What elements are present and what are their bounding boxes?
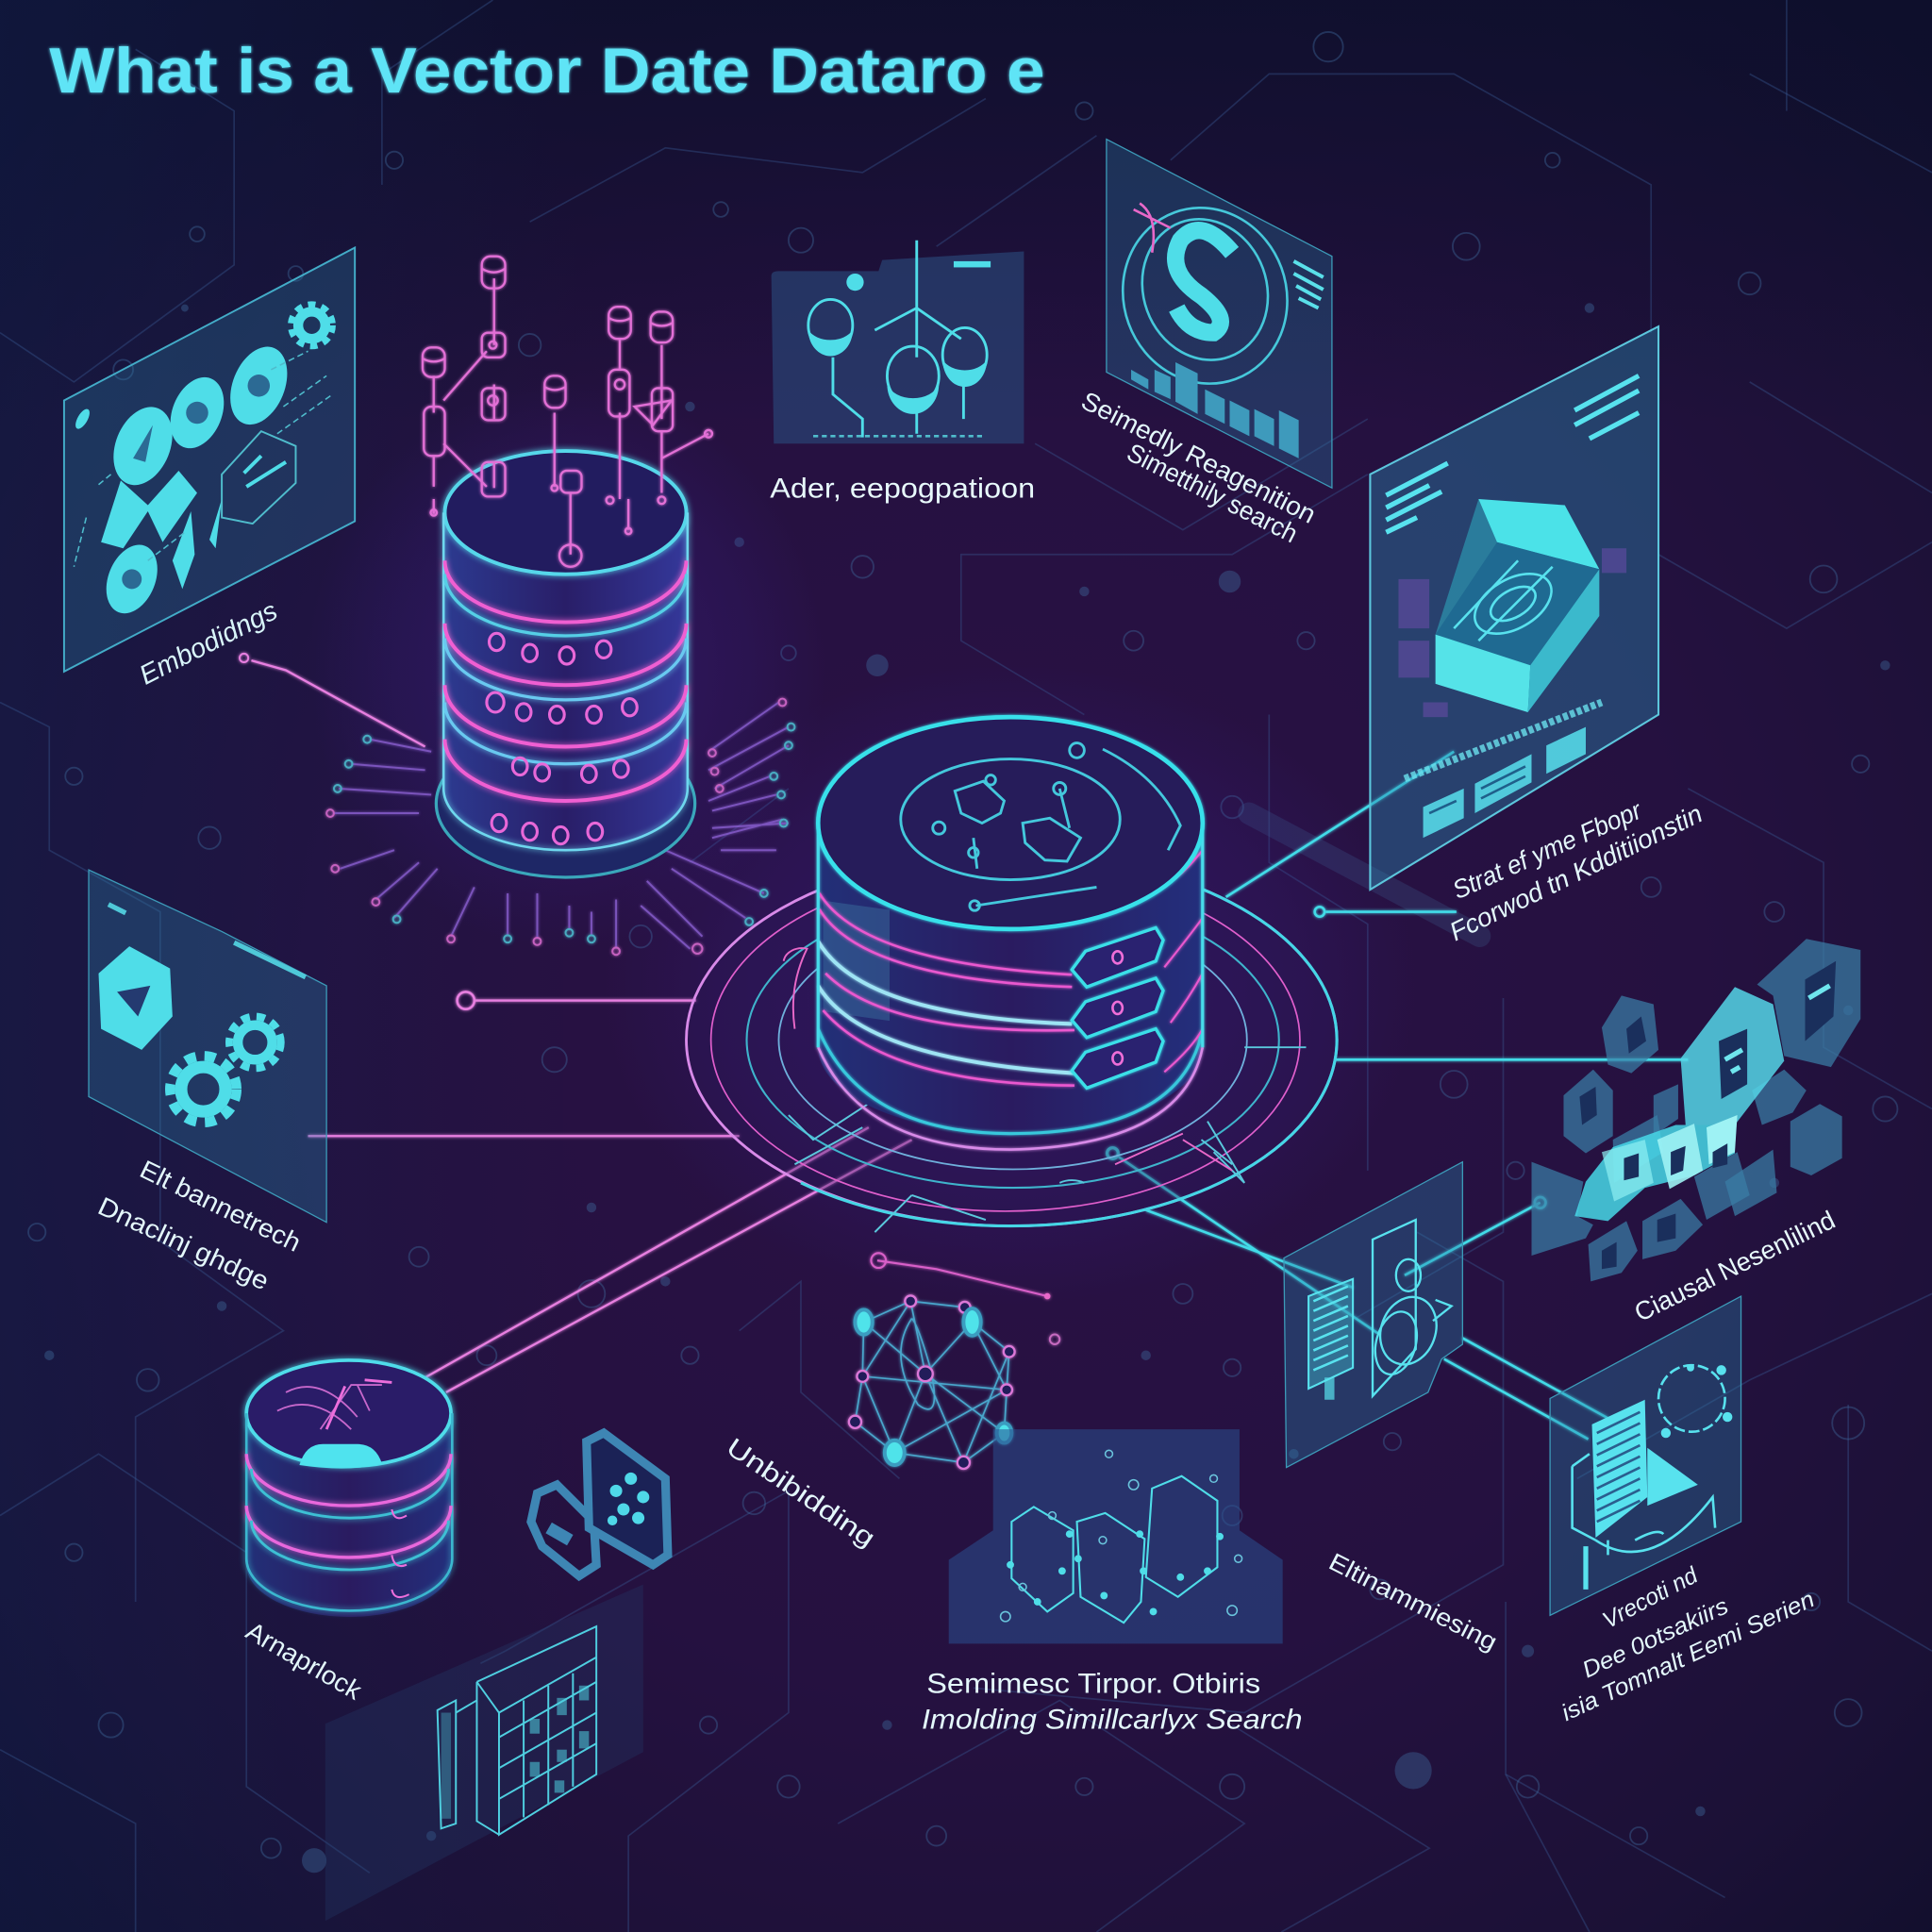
label: document: Dee 0otsakiirs	[1578, 1593, 1732, 1683]
circuit traces around database	[326, 699, 794, 955]
storage dots	[487, 633, 637, 844]
small vector cylinders above database	[423, 257, 712, 567]
panel: gears	[89, 870, 326, 1223]
icon: gears	[170, 1017, 281, 1123]
panel: document	[1550, 1296, 1741, 1615]
label: semantic recognition: Simetthily search	[1123, 438, 1303, 548]
database cylinder	[436, 451, 695, 877]
label: embeddings: Embodidngs	[135, 596, 282, 691]
label: unbibidding: Unbibidding	[722, 1432, 881, 1553]
top hexagons	[901, 743, 1180, 910]
label: gears	[93, 1155, 306, 1295]
panel: semantic recognition	[1098, 140, 1332, 488]
panel: listing and disc	[1284, 1162, 1462, 1468]
label: semantic search	[922, 1669, 1303, 1735]
label: semantic search: Imolding Simillcarlyx Search	[922, 1704, 1303, 1735]
label: semantic recognition: Seimedly Reagenition	[1076, 386, 1321, 529]
icon: cube	[1436, 499, 1599, 712]
label: document: Vrecoti nd	[1599, 1562, 1703, 1634]
panel: storage cube	[1370, 326, 1658, 890]
label: storage: Strat ef yme Fbopr	[1448, 794, 1647, 905]
label: hexagon cluster: Ciausal Nesenlilind	[1629, 1205, 1840, 1327]
server tags	[1072, 928, 1163, 1088]
cylinder body	[818, 823, 1203, 1134]
panel: server rack grid	[325, 1585, 643, 1921]
small database cylinder	[246, 1360, 452, 1617]
panel: hexagon cluster	[1532, 939, 1860, 1281]
label: gears: Dnaclinj ghdge	[93, 1191, 274, 1295]
panel: hex constellation	[949, 1429, 1283, 1643]
icon: gear	[291, 305, 333, 346]
label: document: isia Tomnalt Eemi Serien	[1557, 1587, 1819, 1726]
base ring	[436, 729, 695, 877]
label: semantic search: Semimesc Tirpor. Otbiris	[926, 1669, 1260, 1700]
label: storage: Fcorwod tn Kdditiionstin	[1445, 799, 1707, 946]
panel: adder	[772, 241, 1024, 443]
panel: embeddings	[64, 248, 355, 672]
title: What is a Vector Date Dataro e	[49, 36, 1045, 107]
network graph	[849, 1253, 1059, 1469]
central vector database	[687, 717, 1337, 1232]
icon: paired shields	[531, 1433, 668, 1576]
label: gears: Elt bannetrech	[136, 1155, 306, 1257]
label: adder: Ader, eepogpatioon	[770, 474, 1035, 505]
label: arnaprlock: Arnaprlock	[242, 1616, 367, 1706]
connector lines	[240, 654, 1688, 1440]
orbit rings	[687, 854, 1337, 1232]
label: eliminating: Eltinammiesing	[1324, 1547, 1502, 1657]
